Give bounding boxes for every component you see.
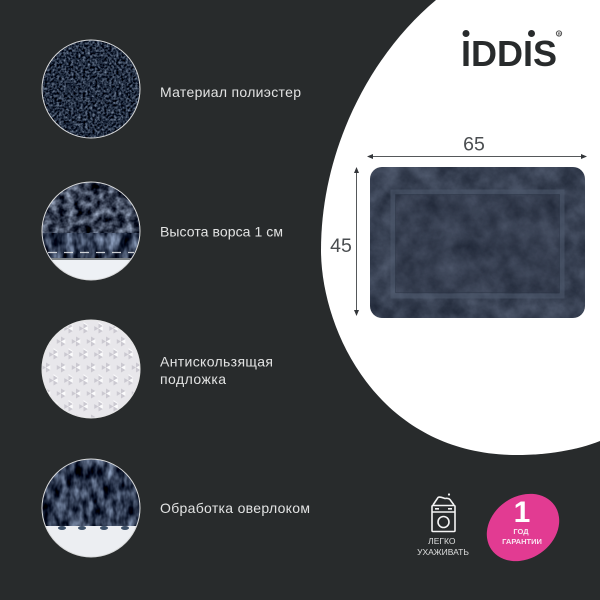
logo: IDDIS: R (558, 31, 562, 36)
product: bath mat (370, 167, 585, 318)
icon: washing machine (432, 493, 455, 532)
label: overlock edge: Обработка оверлоком (160, 500, 310, 516)
caption: easy care: ЛЕГКО (428, 536, 456, 546)
dimension: height 45 (330, 167, 359, 316)
feature photo: overlock edge (42, 459, 140, 558)
badge: 1 year warranty: ГОД (513, 527, 529, 536)
label: anti-slip backing: Антискользящая (160, 354, 273, 370)
label: anti-slip backing: подложка (160, 371, 226, 387)
white curved panel (321, 0, 600, 455)
badge: 1 year warranty: 1 (514, 496, 530, 529)
label: material: Материал полиэстер (160, 84, 301, 100)
label: pile height: Высота ворса 1 см (160, 224, 283, 240)
feature photo: pile material (42, 40, 140, 138)
feature photo: anti-slip backing (42, 320, 140, 418)
logo: IDDIS: IDDIS (461, 33, 557, 74)
dimension: height 45: 45 (330, 235, 352, 257)
badge: 1 year warranty: ГАРАНТИИ (502, 537, 542, 546)
feature photo: pile height (42, 182, 140, 282)
badge: 1 year warranty (474, 480, 572, 575)
caption: easy care: УХАЖИВАТЬ (417, 547, 469, 557)
dimension: width 65 (367, 134, 587, 159)
dimension: width 65: 65 (463, 134, 485, 156)
